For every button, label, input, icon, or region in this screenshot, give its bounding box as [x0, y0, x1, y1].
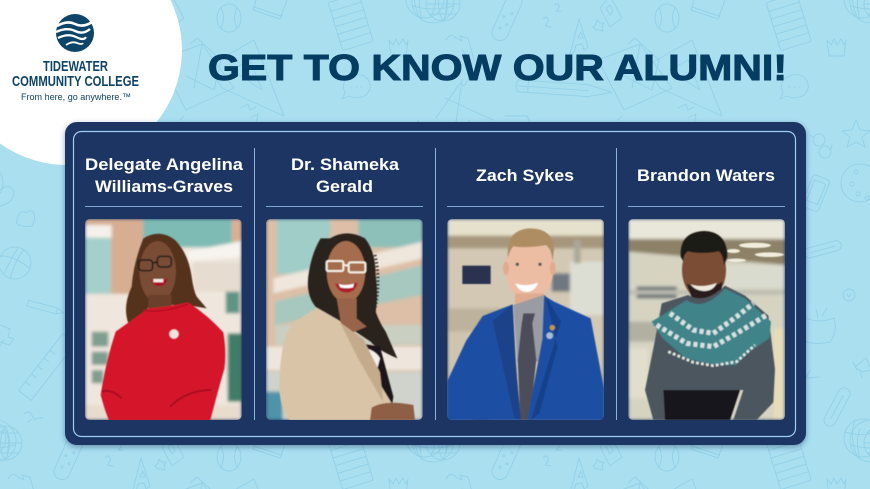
logo name — [12, 58, 139, 90]
photo: Shameka Gerald — [266, 219, 423, 420]
logo badge — [0, 0, 182, 165]
panel: alumni — [65, 122, 806, 445]
name: Shameka Gerald — [291, 155, 400, 196]
name: Brandon Waters: Brandon Waters — [637, 166, 775, 185]
photo: Zach Sykes — [447, 219, 604, 420]
name: Shameka Gerald: Gerald — [316, 177, 373, 196]
title: GET TO KNOW OUR ALUMNI! — [208, 47, 787, 88]
logo name: COMMUNITY COLLEGE — [12, 73, 139, 90]
name: Zach Sykes: Zach Sykes — [476, 166, 574, 185]
name: Angelina Williams-Graves: Delegate Angelina — [85, 155, 244, 174]
name: Shameka Gerald: Dr. Shameka — [291, 155, 400, 174]
name: Angelina Williams-Graves — [85, 155, 244, 196]
logo name: TIDEWATER — [43, 58, 108, 75]
icon: waves globe — [56, 14, 94, 52]
photo: Angelina Williams-Graves — [85, 219, 242, 424]
photo: Brandon Waters — [628, 219, 785, 420]
logo tagline: From here, go anywhere.™ — [21, 92, 131, 103]
name: Angelina Williams-Graves: Williams-Graves — [95, 177, 233, 196]
